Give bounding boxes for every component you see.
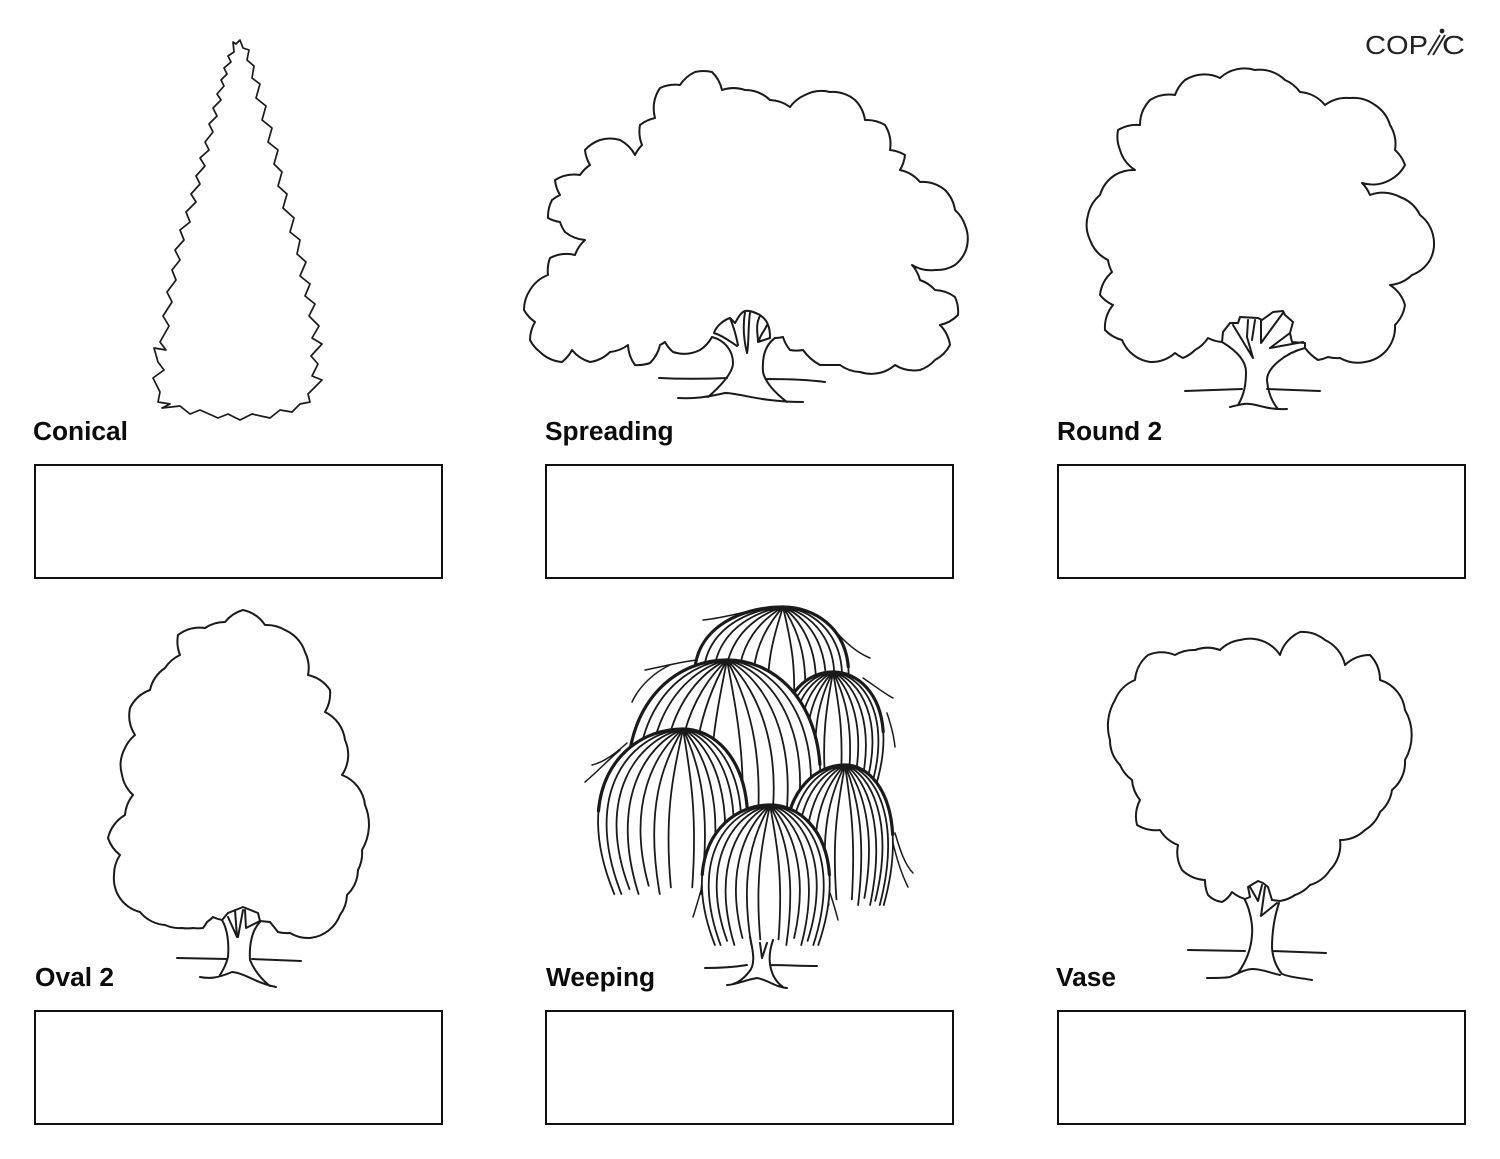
answer box: vase bbox=[1058, 1011, 1465, 1124]
label: Conical: Conical bbox=[33, 416, 128, 446]
label: Round 2: Round 2 bbox=[1057, 416, 1162, 446]
panel: vase bbox=[1056, 632, 1465, 1124]
logo: Copic: COP bbox=[1365, 30, 1428, 60]
round tree canopy bbox=[1087, 68, 1434, 363]
panel: oval 2 bbox=[35, 610, 442, 1124]
panel: round 2 bbox=[1057, 68, 1465, 578]
oval tree trunk bbox=[177, 907, 301, 987]
spreading tree trunk bbox=[659, 311, 825, 402]
logo: Copic: C bbox=[1442, 30, 1465, 60]
label: Oval 2: Oval 2 bbox=[35, 962, 114, 992]
panel: conical bbox=[33, 40, 442, 578]
panel: spreading bbox=[524, 71, 968, 578]
answer box: spreading bbox=[546, 465, 953, 578]
vase tree trunk bbox=[1188, 881, 1326, 980]
label: Spreading: Spreading bbox=[545, 416, 674, 446]
weeping tree canopy bbox=[585, 607, 913, 945]
vase tree canopy bbox=[1108, 632, 1412, 902]
oval tree canopy bbox=[108, 610, 369, 938]
label: Vase: Vase bbox=[1056, 962, 1116, 992]
spreading tree canopy bbox=[524, 71, 968, 374]
round tree trunk bbox=[1185, 311, 1320, 409]
weeping tree trunk bbox=[705, 937, 817, 988]
logo: Copic bbox=[1365, 29, 1465, 60]
label: Weeping: Weeping bbox=[546, 962, 655, 992]
answer box: weeping bbox=[546, 1011, 953, 1124]
panel: weeping bbox=[546, 607, 953, 1124]
answer box: round 2 bbox=[1058, 465, 1465, 578]
answer box: conical bbox=[35, 465, 442, 578]
conical tree outline bbox=[153, 40, 322, 420]
answer box: oval 2 bbox=[35, 1011, 442, 1124]
